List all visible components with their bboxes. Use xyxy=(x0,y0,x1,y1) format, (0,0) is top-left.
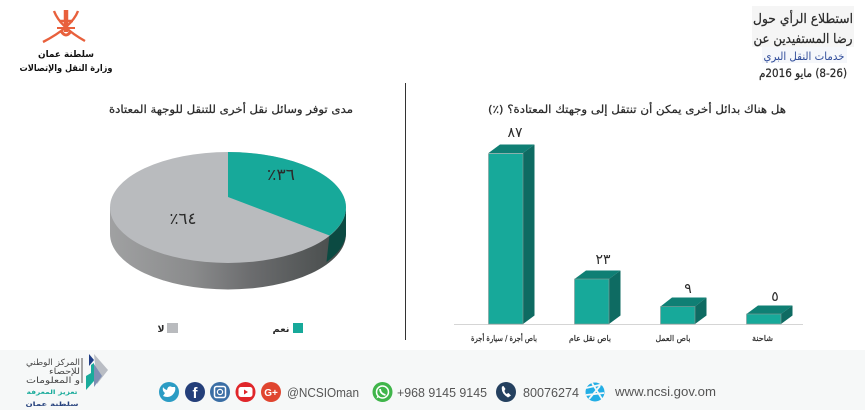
icon: twitter xyxy=(159,382,179,402)
twitter handle: @NCSIOman xyxy=(287,386,359,400)
label 36 percent: ٪٣٦ xyxy=(267,165,295,184)
baseline xyxy=(454,324,803,325)
bar: work bus 9 xyxy=(656,281,706,343)
NCSI logo: تعزيز المعرفة xyxy=(26,389,78,396)
bar: truck 5: ٥ xyxy=(771,289,779,305)
bar chart heading: هل هناك بدائل أخرى يمكن أن تنتقل إلى وجهتك المعتادة؟ (٪) xyxy=(488,102,786,116)
icon: facebook: f xyxy=(192,385,198,402)
icon: phone xyxy=(496,382,516,402)
icon: facebook xyxy=(185,382,205,402)
pie slice no 64 xyxy=(110,152,346,263)
bar: work bus 9: ٩ xyxy=(684,281,692,297)
bar: public bus 23: ٢٣ xyxy=(595,252,611,268)
ministry logo xyxy=(20,10,112,74)
label 64 percent: ٪٦٤ xyxy=(170,209,196,228)
ministry name line 2: وزارة النقل والإتصالات xyxy=(20,64,112,74)
NCSI logo xyxy=(26,354,108,408)
website: www.ncsi.gov.om xyxy=(614,385,716,399)
header title block xyxy=(752,6,854,81)
bar: taxi 87: باص أجرة / سيارة أجرة xyxy=(471,333,537,343)
panel: bar chart xyxy=(454,102,803,343)
survey title line 1: استطلاع الرأي حول xyxy=(753,10,853,27)
NCSI mark xyxy=(94,354,108,384)
pie side wall xyxy=(110,207,346,289)
pie slice yes 36 xyxy=(228,152,346,236)
legend: no: لا xyxy=(158,325,164,335)
bar: taxi 87 xyxy=(471,125,537,343)
ministry name line 1: سلطنة عمان xyxy=(38,50,94,60)
whatsapp number: +968 9145 9145 xyxy=(397,386,487,400)
NCSI logo: للإحصاء xyxy=(49,367,80,377)
bar: truck 5 xyxy=(746,289,792,343)
survey subtitle: خدمات النقل البري xyxy=(764,50,844,63)
survey title line 2: رضا المستفيدين عن xyxy=(754,32,852,47)
icon: google plus: G+ xyxy=(264,388,278,399)
legend: yes: نعم xyxy=(272,325,290,335)
legend: yes xyxy=(272,323,303,335)
NCSI logo: و المعلومات xyxy=(26,376,80,386)
icon: youtube xyxy=(236,382,256,402)
phone number: 80076274 xyxy=(523,386,579,400)
bar: work bus 9: باص العمل xyxy=(656,334,690,343)
icon: globe xyxy=(586,382,604,402)
pie side wall teal xyxy=(326,207,346,262)
icon: instagram xyxy=(210,382,230,402)
survey date: (8-26) مايو 2016م xyxy=(759,66,847,81)
bar: taxi 87: ٨٧ xyxy=(507,125,523,141)
divider xyxy=(405,83,406,340)
NCSI logo: سلطنة عمان xyxy=(26,401,79,408)
legend: no xyxy=(158,323,178,335)
bar: public bus 23: باص نقل عام xyxy=(569,334,611,343)
NCSI name: المركز الوطني xyxy=(26,358,80,368)
pie heading: مدى توفر وسائل نقل أخرى للتنقل للوجهة المعتادة xyxy=(109,102,353,116)
icon: national emblem xyxy=(43,10,85,42)
bar: public bus 23 xyxy=(569,252,620,343)
icon: whatsapp xyxy=(372,382,392,402)
icon: google plus xyxy=(261,382,281,402)
bar: truck 5: شاحنة xyxy=(752,334,773,343)
panel: pie chart xyxy=(109,102,353,335)
panel: footer xyxy=(0,350,865,410)
